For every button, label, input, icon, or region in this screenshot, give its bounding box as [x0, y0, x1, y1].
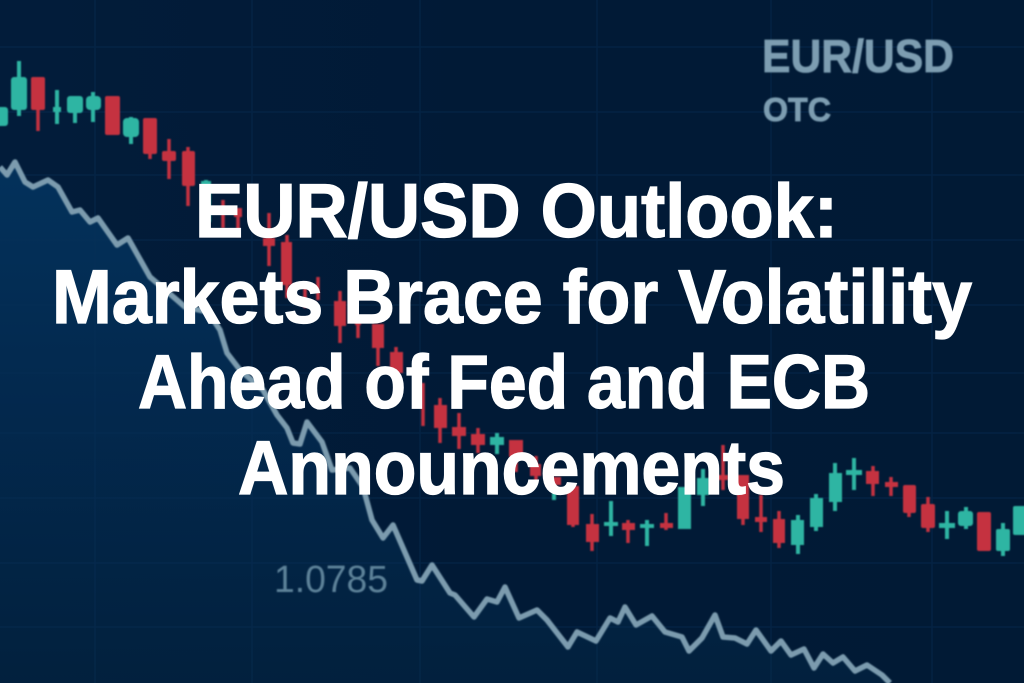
headline line 3: Ahead of Fed and ECB: [138, 340, 870, 425]
headline line 2: Markets Brace for Volatility: [52, 255, 972, 340]
shaded area under price line: [0, 162, 890, 683]
price line: [0, 162, 890, 683]
pair label: [762, 30, 954, 128]
price label: 1.0785: [274, 559, 388, 601]
bullish candles: [0, 61, 1024, 556]
label: EUR/USD: EUR/USD: [762, 30, 954, 82]
bearish candles: [31, 77, 991, 551]
headline line 4: Announcements: [238, 426, 785, 511]
headline: [52, 169, 972, 511]
headline line 1: EUR/USD Outlook:: [195, 169, 838, 254]
label: OTC: OTC: [763, 91, 831, 128]
candlestick chart: [0, 61, 1024, 556]
